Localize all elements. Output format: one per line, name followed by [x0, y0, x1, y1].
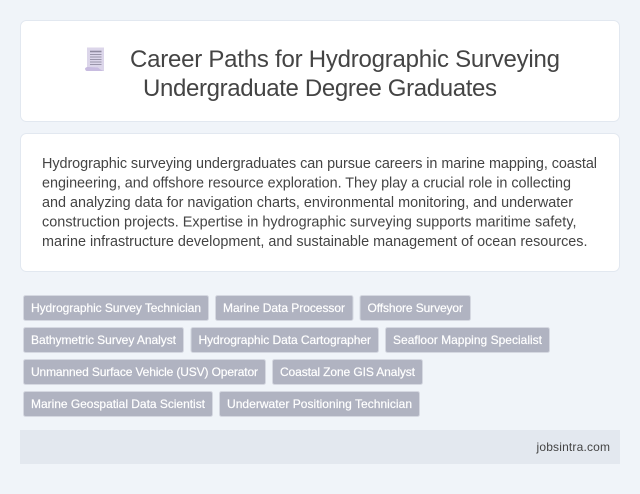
footer credit: jobsintra.com	[536, 440, 610, 454]
description text: construction projects. Expertise in hydrographic surveying supports maritime safety,	[42, 214, 576, 230]
tag: Marine Data Processor	[223, 301, 345, 315]
tag	[24, 296, 208, 320]
title	[130, 46, 560, 102]
tag: Underwater Positioning Technician	[227, 397, 412, 411]
tag	[272, 360, 422, 384]
description text	[42, 156, 597, 250]
tag	[216, 296, 353, 320]
career tags	[24, 296, 550, 416]
tag	[220, 392, 420, 416]
tag	[24, 328, 184, 352]
title: Career Paths for Hydrographic Surveying	[130, 46, 560, 73]
tag: Hydrographic Survey Technician	[31, 301, 201, 315]
tag	[386, 328, 550, 352]
tag: Coastal Zone GIS Analyst	[280, 365, 416, 379]
tag	[24, 392, 212, 416]
description text: marine infrastructure development, and sustainable management of ocean resources.	[42, 234, 588, 250]
tag: Marine Geospatial Data Scientist	[31, 397, 206, 411]
tag	[360, 296, 470, 320]
tag: Offshore Surveyor	[368, 301, 463, 315]
tag	[191, 328, 378, 352]
tag	[24, 360, 266, 384]
description panel	[20, 134, 620, 272]
tag: Unmanned Surface Vehicle (USV) Operator	[31, 365, 258, 379]
header panel	[20, 20, 620, 122]
tag: Seafloor Mapping Specialist	[393, 333, 543, 347]
description text: and analyzing data for navigation charts, environmental monitoring, and underwater	[42, 195, 573, 211]
footer bar	[20, 430, 620, 464]
description text: Hydrographic surveying undergraduates can pursue careers in marine mapping, coastal	[42, 156, 597, 172]
tag: Hydrographic Data Cartographer	[198, 333, 371, 347]
title: Undergraduate Degree Graduates	[143, 75, 497, 102]
icon: document scroll	[85, 48, 104, 71]
description text: engineering, and offshore resource exploration. They play a crucial role in collecting	[42, 176, 571, 192]
tag: Bathymetric Survey Analyst	[31, 333, 177, 347]
